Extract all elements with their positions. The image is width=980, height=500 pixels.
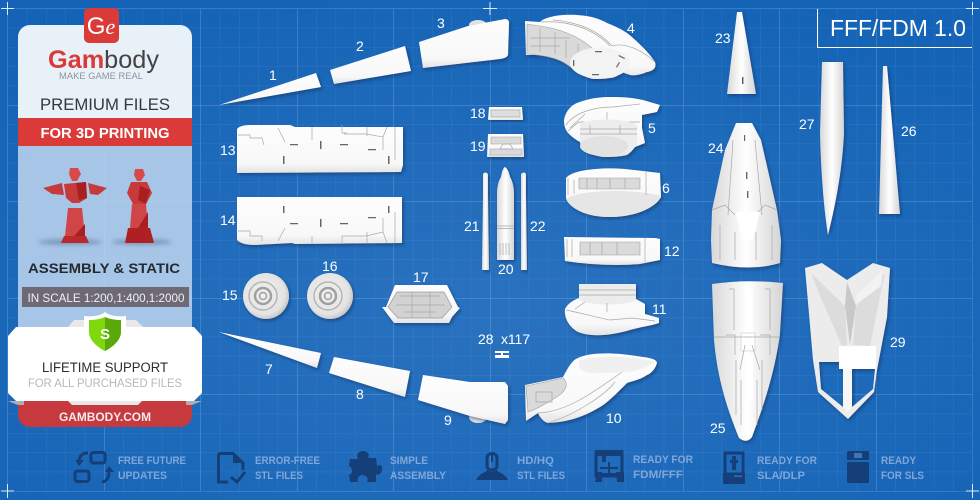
part 17 <box>382 269 460 323</box>
part 22 <box>521 172 546 270</box>
feature: ready for SLS <box>847 451 924 483</box>
part 26: 26 <box>901 123 917 139</box>
part 13: 13 <box>220 142 236 158</box>
part 11 <box>565 284 667 335</box>
part 24: 24 <box>708 140 724 156</box>
part 25: 25 <box>710 420 726 436</box>
logo: Ge badge <box>84 8 119 43</box>
part 28: 28 x117 <box>478 331 530 347</box>
part 18: 18 <box>470 105 486 121</box>
feature strip <box>75 450 924 484</box>
feature: ready for FDM/FFF <box>595 450 693 482</box>
part 28 <box>478 331 530 358</box>
part 8: 8 <box>356 386 364 402</box>
feature: ready for FDM/FFF: READY FOR <box>633 454 693 466</box>
heading: assembly and static: ASSEMBLY & STATIC <box>28 260 180 276</box>
part 12 <box>564 237 680 265</box>
part 27: 27 <box>799 116 815 132</box>
icon: shield <box>84 312 126 353</box>
part 6 <box>566 168 670 217</box>
feature: ready for SLS: FOR SLS <box>881 470 924 482</box>
part 11: 11 <box>652 301 667 317</box>
part 22: 22 <box>530 218 546 234</box>
feature: free future updates <box>75 452 186 482</box>
part 7 <box>219 332 321 377</box>
part 13 <box>220 125 403 173</box>
part 29: 29 <box>890 334 906 350</box>
feature: HD/HQ STL files <box>476 454 565 482</box>
heading: premium files: PREMIUM FILES <box>40 96 170 114</box>
red footer: gambody.com: GAMBODY.COM <box>59 410 151 424</box>
part 19 <box>470 134 524 157</box>
icon: shield: S <box>100 326 110 343</box>
part 5 <box>564 97 660 157</box>
panel: sidebar <box>8 8 202 427</box>
feature: ready for SLS: READY <box>881 455 917 467</box>
label box: FFF/FDM version: FFF/FDM 1.0 <box>830 15 966 41</box>
part 18 <box>470 105 523 121</box>
label box: FFF/FDM version <box>818 9 972 48</box>
part 2 <box>330 38 411 84</box>
card: lifetime support <box>8 320 202 405</box>
part 2: 2 <box>356 38 364 54</box>
feature: error-free STL files <box>218 453 320 482</box>
part 25 <box>710 281 783 441</box>
part 16: 16 <box>322 258 338 274</box>
part 23: 23 <box>715 30 731 46</box>
part 16 <box>307 258 353 319</box>
part 3 <box>419 15 509 68</box>
heading band: for 3D printing: FOR 3D PRINTING <box>40 125 170 142</box>
part 5: 5 <box>648 120 656 136</box>
part 29 <box>805 263 906 419</box>
feature: ready for SLA/DLP <box>723 453 817 484</box>
scale label: IN SCALE 1:200,1:400,1:2000 <box>28 291 185 305</box>
part 23 <box>715 12 756 94</box>
figure: arms out <box>38 168 107 244</box>
feature: free future updates: UPDATES <box>118 470 167 482</box>
card: lifetime support: LIFETIME SUPPORT <box>42 360 168 375</box>
feature: ready for SLA/DLP: READY FOR <box>757 455 817 467</box>
figure: arms folded <box>112 169 172 244</box>
part 8 <box>329 357 410 402</box>
part 3: 3 <box>437 15 445 31</box>
part 9 <box>418 375 508 428</box>
red footer: gambody.com <box>18 400 192 427</box>
part 10 <box>525 353 657 426</box>
part 10: 10 <box>606 410 622 426</box>
feature: HD/HQ STL files: STL FILES <box>517 470 565 482</box>
part 27 <box>799 62 844 235</box>
part 21 <box>464 172 489 270</box>
scale label <box>22 287 189 307</box>
logo: Gambody wordmark: Gambody <box>48 46 159 74</box>
logo: Ge badge: Ge <box>87 13 115 40</box>
part 24 <box>708 123 781 268</box>
part 14 <box>220 197 402 245</box>
part 12: 12 <box>664 243 680 259</box>
part 15: 15 <box>222 287 238 303</box>
feature: simple assembly <box>349 451 447 482</box>
part 17: 17 <box>413 269 429 285</box>
feature: free future updates: FREE FUTURE <box>118 455 186 467</box>
part 1: 1 <box>269 67 277 83</box>
part 4: 4 <box>627 20 635 36</box>
card: lifetime support: FOR ALL PURCHASED FILES <box>28 378 182 390</box>
feature: HD/HQ STL files: HD/HQ <box>517 455 554 467</box>
part 1 <box>219 67 321 105</box>
part 9: 9 <box>444 412 452 428</box>
part 20: 20 <box>498 261 514 277</box>
part 20 <box>497 167 514 277</box>
feature: ready for SLA/DLP: SLA/DLP <box>757 470 805 482</box>
part 21: 21 <box>464 218 480 234</box>
feature: error-free STL files: ERROR-FREE <box>255 455 320 467</box>
part 15 <box>222 273 289 319</box>
logo: Gambody wordmark: MAKE GAME REAL <box>59 71 143 82</box>
feature: simple assembly: ASSEMBLY <box>390 470 447 482</box>
part 6: 6 <box>662 180 670 196</box>
part 14: 14 <box>220 212 236 228</box>
part 4 <box>525 15 656 79</box>
feature: ready for FDM/FFF: FDM/FFF <box>633 469 683 481</box>
part 7: 7 <box>265 361 273 377</box>
part 26 <box>879 66 917 214</box>
heading band: for 3D printing <box>18 118 192 146</box>
part 19: 19 <box>470 138 486 154</box>
feature: simple assembly: SIMPLE <box>390 455 428 467</box>
feature: error-free STL files: STL FILES <box>255 470 303 482</box>
